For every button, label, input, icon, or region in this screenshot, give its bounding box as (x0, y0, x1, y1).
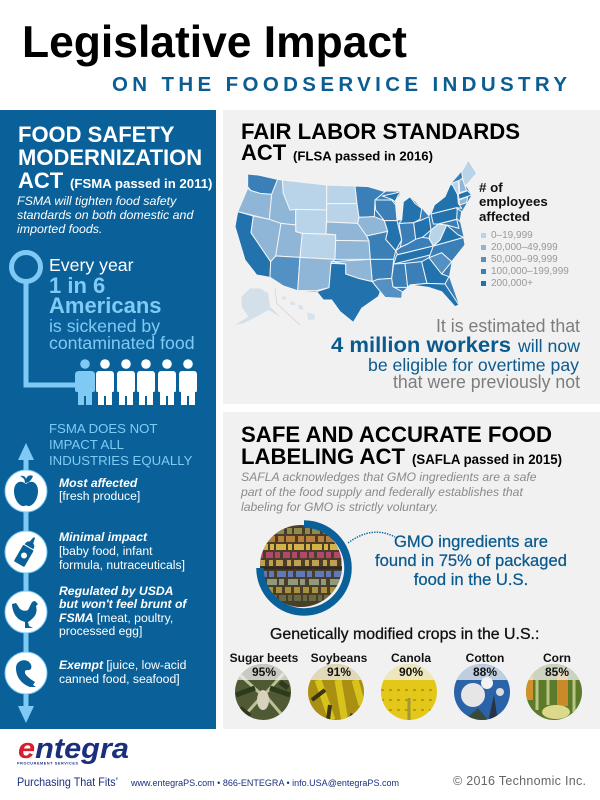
impact list: [fresh produce] (59, 489, 140, 503)
crop: canola (381, 651, 437, 720)
map legend: employees (479, 194, 548, 209)
heading: SAFLA (241, 422, 562, 469)
title: Legislative Impact (22, 18, 407, 67)
FSMA description: imported foods. (17, 222, 102, 236)
heading: FLSA: FAIR LABOR STANDARDS (241, 119, 520, 144)
subheading: impact: INDUSTRIES EQUALLY (49, 453, 193, 468)
SAFLA description: SAFLA acknowledges that GMO ingredients are a safe (241, 470, 537, 484)
map legend: 100,000–199,999 (491, 266, 569, 277)
subheading: impact (49, 421, 193, 468)
callout: 4 million workers: It is estimated that (436, 316, 580, 336)
heading: FSMA: FOOD SAFETY (18, 122, 175, 147)
map legend: affected (479, 209, 530, 224)
impact list (59, 476, 188, 686)
statistic: 1 in 6 Americans: is sickened by (49, 316, 160, 336)
panel: safe and accurate food labeling act (223, 412, 600, 729)
arrow: impact scale (18, 443, 34, 723)
crop: canola: Canola (391, 651, 431, 665)
statistic: 1 in 6 Americans: contaminated food (49, 333, 195, 353)
footer: contact: www.entegraPS.com • 866-ENTEGRA • info.USA@entegraPS.com (130, 778, 399, 788)
subheading: impact: IMPACT ALL (49, 437, 124, 452)
map legend: 200,000+ (491, 278, 533, 289)
impact list: Most affected (59, 476, 138, 490)
statistic: 1 in 6 Americans: Every year (49, 255, 134, 275)
statistic: 1 in 6 Americans: 1 in 6 (49, 273, 105, 298)
heading: SAFLA: LABELING ACT (241, 444, 405, 469)
heading: FSMA: MODERNIZATION (18, 145, 202, 170)
impact list: canned food, seafood] (59, 672, 180, 686)
footer: tagline: Purchasing That Fits’ (17, 775, 118, 789)
FSMA description: standards on both domestic and (17, 208, 194, 222)
SAFLA description: labeling for GMO is strictly voluntary. (241, 500, 439, 514)
SAFLA description (240, 470, 537, 514)
title: ON THE FOODSERVICE INDUSTRY (112, 73, 567, 96)
callout: GMO ingredients: found in 75% of packaged (375, 551, 567, 570)
heading: FLSA: (FLSA passed in 2016) (293, 148, 433, 164)
impact list: Exempt [juice, low-acid (59, 658, 186, 672)
FSMA description: FSMA will tighten food safety (17, 194, 177, 208)
heading: FSMA: ACT (18, 168, 64, 193)
impact list: but won't feel brunt of (59, 597, 188, 611)
map legend: 20,000–49,999 (491, 242, 558, 253)
icon: apple (5, 470, 47, 512)
callout: GMO ingredients: food in the U.S. (414, 570, 528, 589)
map legend: # of (479, 180, 503, 195)
map legend: 50,000–99,999 (491, 254, 558, 265)
impact list: Regulated by USDA (59, 584, 173, 598)
map: United States (235, 160, 477, 325)
callout: 4 million workers: 4 million workers (331, 333, 511, 357)
icon: hen (5, 591, 47, 633)
callout: GMO ingredients (375, 532, 567, 589)
impact list: [baby food, infant (59, 544, 153, 558)
crop: sugar beets (230, 651, 299, 720)
heading: FLSA (241, 119, 520, 165)
impact list: FSMA [meat, poultry, (59, 611, 173, 625)
crop: corn: 85% (545, 665, 569, 679)
crop: sugar beets: 95% (252, 665, 276, 679)
footer: entegra logo: PROCUREMENT SERVICES (17, 762, 78, 766)
callout: GMO ingredients: GMO ingredients are (394, 532, 548, 551)
callout: 4 million workers: that were previously not (393, 372, 580, 392)
icon: six people (75, 359, 197, 405)
heading: FLSA: ACT (241, 140, 287, 165)
map legend: 0–19,999 (491, 230, 533, 241)
impact list: Minimal impact (59, 530, 148, 544)
panel: food safety modernization act (0, 110, 216, 729)
heading: SAFLA: SAFE AND ACCURATE FOOD (241, 422, 552, 447)
crop: sugar beets: Sugar beets (230, 651, 299, 665)
icon: shrimp (5, 652, 47, 694)
heading: crops: Genetically modified crops in the U.S.: (270, 626, 539, 643)
heading: FSMA: (FSMA passed in 2011) (70, 176, 212, 191)
crop: cotton (454, 651, 510, 722)
impact list: processed egg] (59, 624, 142, 638)
statistic: 1 in 6 Americans: Americans (49, 293, 162, 318)
heading: FSMA (18, 122, 212, 193)
callout: 4 million workers: will now (517, 336, 580, 356)
statistic: 1 in 6 Americans (49, 255, 195, 353)
crop: cotton: 88% (473, 665, 497, 679)
impact list: formula, nutraceuticals] (59, 558, 185, 572)
footer: entegra logo: entegra (18, 733, 129, 765)
title (22, 18, 567, 96)
map legend (479, 180, 569, 289)
panel: fair labor standards act (223, 110, 600, 404)
donut: 75% of packaged food (258, 524, 395, 612)
callout: 4 million workers (331, 316, 580, 392)
icon: baby bottle (5, 531, 47, 573)
callout: 4 million workers: be eligible for overtime pay (368, 355, 579, 375)
crop: soybeans (308, 651, 368, 722)
crop: canola: 90% (399, 665, 423, 679)
crop: soybeans: 91% (327, 665, 351, 679)
subheading: impact: FSMA DOES NOT (49, 421, 157, 436)
connector: ring and line (12, 252, 80, 385)
footer: copyright: © 2016 Technomic Inc. (453, 774, 586, 788)
crop: soybeans: Soybeans (311, 651, 368, 665)
crop: corn (526, 651, 582, 720)
FSMA description (17, 194, 194, 236)
heading: SAFLA: (SAFLA passed in 2015) (412, 452, 562, 467)
crop: corn: Corn (543, 651, 571, 665)
SAFLA description: part of the food supply and federally establishes that (240, 485, 523, 499)
crop: cotton: Cotton (466, 651, 504, 665)
